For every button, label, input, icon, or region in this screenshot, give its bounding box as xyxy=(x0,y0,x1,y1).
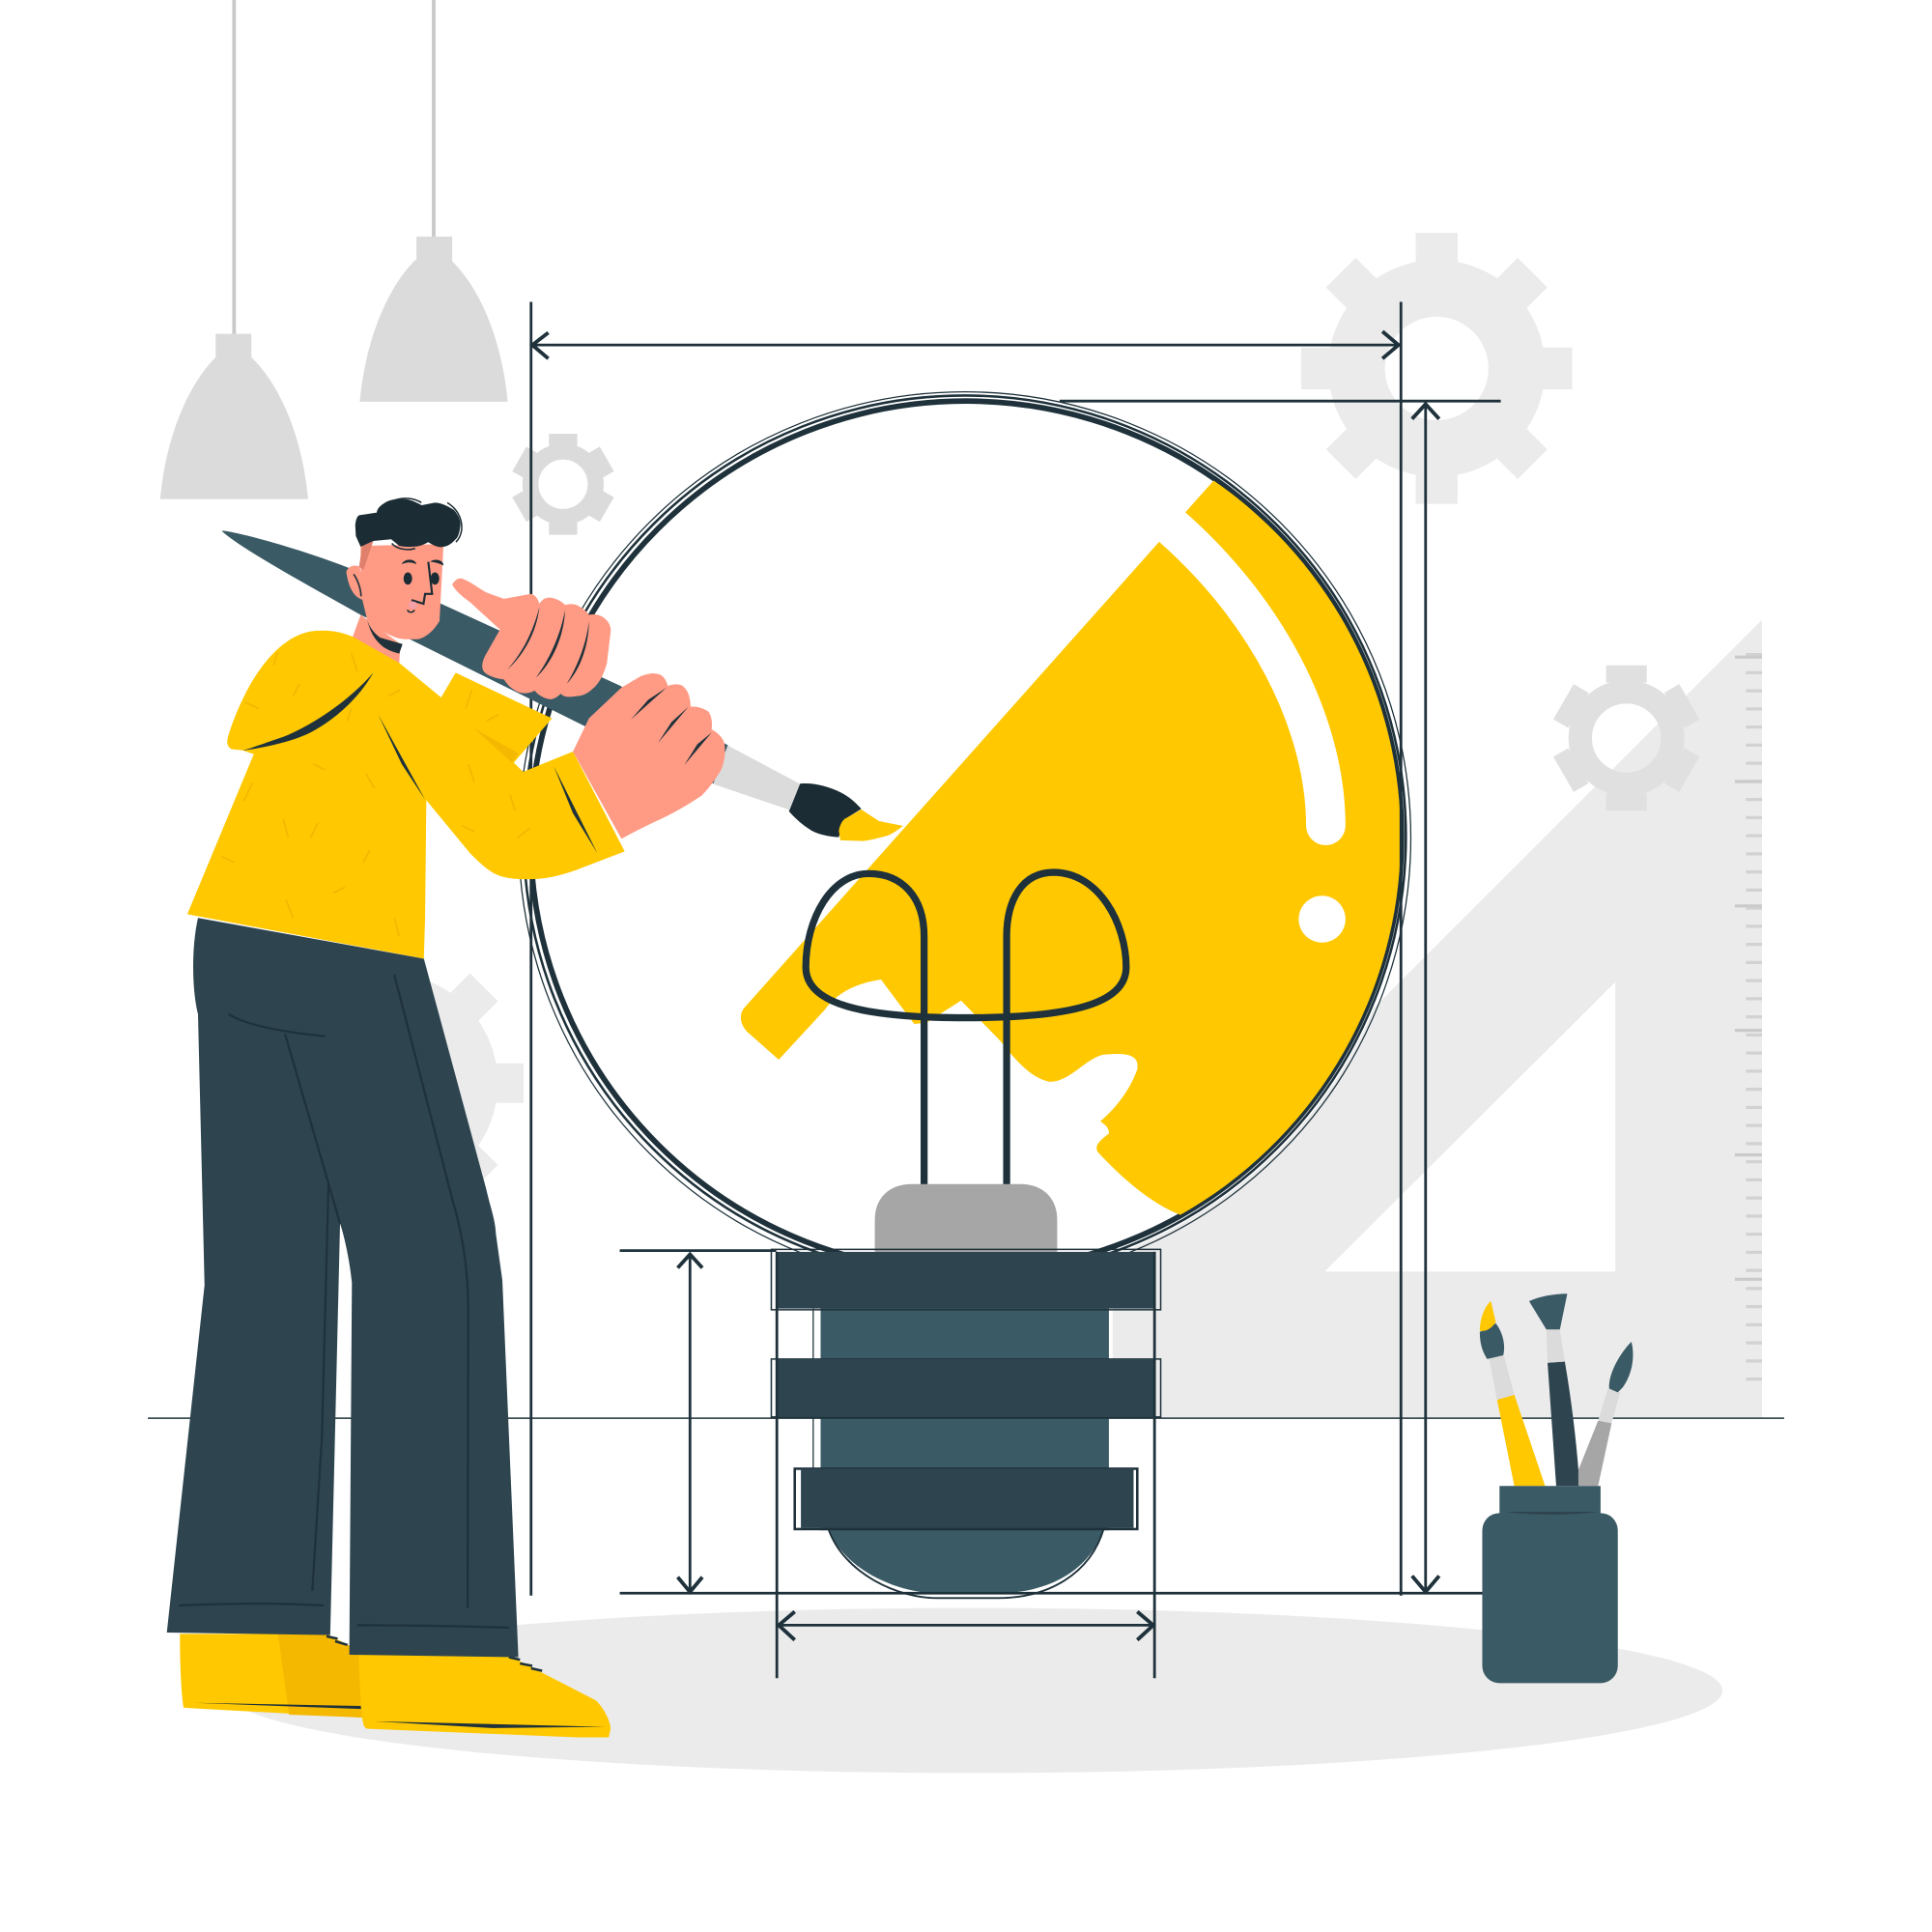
brows xyxy=(402,559,416,564)
paint jar with brushes xyxy=(1480,1293,1633,1683)
ground shadow xyxy=(224,1608,1722,1773)
gear: large top right xyxy=(1301,233,1573,504)
pendant lamp left xyxy=(160,0,308,499)
pendant lamp right xyxy=(359,0,508,402)
gear: on ruler xyxy=(1564,666,1690,810)
hair xyxy=(355,499,461,547)
head xyxy=(346,498,462,639)
yellow paint in bulb xyxy=(741,480,1401,1215)
upper hand xyxy=(452,579,611,699)
bulb highlight dot xyxy=(1298,895,1346,943)
blueprint dimension lines xyxy=(148,301,1784,1678)
ear xyxy=(346,566,365,600)
filament xyxy=(806,872,1126,1185)
sweater fold lines xyxy=(242,672,373,751)
gray brush xyxy=(1578,1342,1633,1486)
gear: small near bulb xyxy=(520,434,607,535)
bulb base xyxy=(771,1249,1161,1598)
trousers xyxy=(167,918,519,1658)
yellow brush xyxy=(1480,1301,1545,1486)
bulb socket xyxy=(875,1184,1057,1252)
person xyxy=(167,498,903,1737)
front shoe xyxy=(349,1655,611,1737)
bulb glass xyxy=(519,392,1410,1284)
collar shadow xyxy=(367,620,403,654)
dark brush xyxy=(1529,1293,1579,1486)
nose and mouth xyxy=(412,562,432,604)
lower hand xyxy=(573,673,724,838)
set square ruler xyxy=(963,620,1762,1418)
back shoe xyxy=(180,1634,365,1718)
gear: behind person xyxy=(308,987,524,1179)
sweater xyxy=(187,631,625,958)
neck xyxy=(353,614,401,663)
bulb highlight stroke xyxy=(1152,510,1325,826)
brush xyxy=(222,531,903,841)
eyes xyxy=(404,572,412,584)
